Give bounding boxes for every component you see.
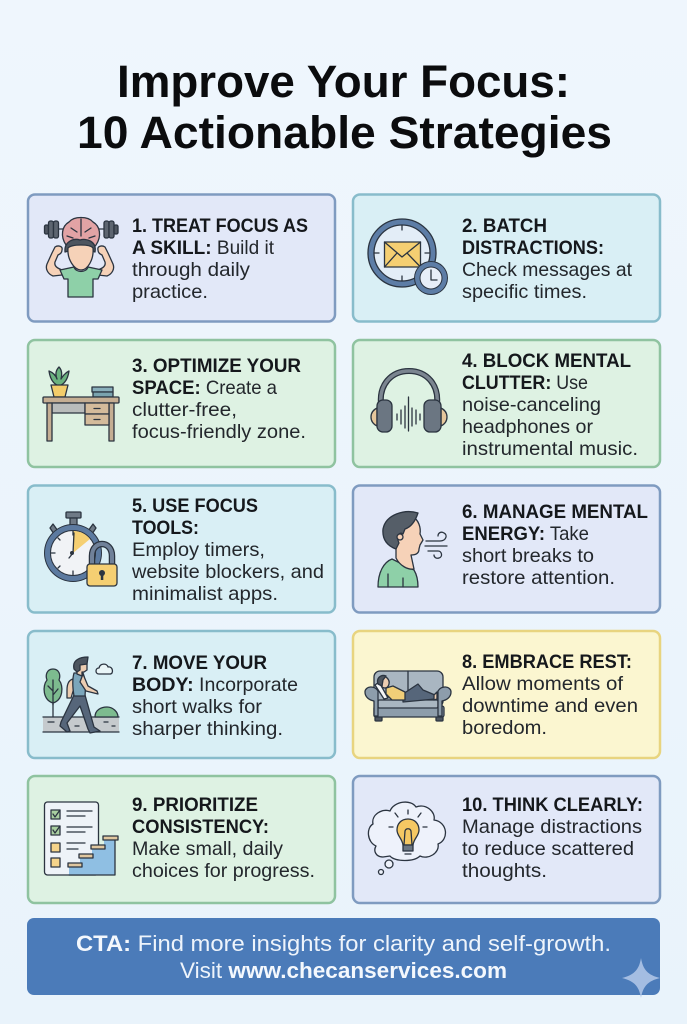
text block: sharper thinking. [132,718,283,740]
panel: 1 treat focus as a skill [28,194,335,322]
text block: headphones or [462,416,593,438]
text block: CLUTTER: Use [462,372,588,394]
text block [131,495,324,605]
icon: desk with plant and books [43,367,119,441]
text block: focus-friendly zone. [132,421,306,443]
title: Improve Your Focus: [117,56,570,107]
panel: 3 optimize your space [28,340,335,467]
title: 10 Actionable Strategies [77,107,612,158]
text block: cta: Visit www.checanservices.com [180,958,507,983]
text block: 4. BLOCK MENTAL [462,350,631,372]
text block: CONSISTENCY: [132,816,269,838]
panel: 6 manage mental energy [353,486,660,612]
text block [462,501,648,589]
text block: clutter-free, [132,399,237,421]
icon: stopwatch and padlock [44,512,117,586]
text block [462,794,643,882]
text block: 5. USE FOCUS [132,495,258,517]
text block: downtime and even [462,695,638,717]
text block: 3. OPTIMIZE YOUR [132,355,301,377]
text block [462,350,638,460]
text block [132,355,306,443]
text block: boredom. [462,717,547,739]
text block [132,652,298,740]
text block: A SKILL: Build it [132,237,275,259]
text block: short breaks to [462,545,594,567]
text block: Employ timers, [132,539,265,561]
text block: 9. PRIORITIZE [132,794,258,816]
text block: 7. MOVE YOUR [132,652,267,674]
icon: brain dumbbell person [44,218,118,297]
text block [462,651,638,739]
text block: choices for progress. [132,860,315,882]
text block: restore attention. [462,567,615,589]
text block: 6. MANAGE MENTAL [462,501,648,523]
text block: 1. TREAT FOCUS AS [132,215,308,237]
panel: 8 embrace rest [353,631,660,758]
panel: call to action [27,918,660,998]
text block: cta: CTA: Find more insights for clarity and self-growth. [76,931,611,956]
text block: instrumental music. [462,438,638,460]
text block: minimalist apps. [132,583,278,605]
panel: 9 prioritize consistency [28,776,335,903]
text block: 10. THINK CLEARLY: [462,794,643,816]
text block: Make small, daily [132,838,283,860]
text block: Allow moments of [462,673,624,695]
panel: 5 use focus tools [28,486,335,612]
text block: specific times. [462,281,587,303]
text block [132,794,315,882]
text block: to reduce scattered [462,838,634,860]
text block: noise-canceling [462,394,601,416]
panel: 4 block mental clutter [353,340,660,467]
text block: 8. EMBRACE REST: [462,651,632,673]
text block: through daily [132,259,250,281]
text block: TOOLS: [132,517,199,539]
icon: person resting on sofa [365,671,451,721]
icon: walking person outdoors [43,657,119,733]
text block: thoughts. [462,860,547,882]
text block: SPACE: Create a [132,377,277,399]
text block [132,215,308,303]
icon: headphones with sound wave [371,371,447,432]
title [77,56,612,158]
text block: cta [76,931,611,983]
text block: practice. [132,281,208,303]
panel: 2 batch distractions [353,194,660,322]
text block: BODY: Incorporate [132,674,298,696]
text block: 2. BATCH [462,215,547,237]
text block: DISTRACTIONS: [462,237,604,259]
icon: sparkle [622,958,660,998]
text block: ENERGY: Take [462,523,589,545]
icon: clock with envelope [368,219,448,295]
icon: thought cloud with light bulb [368,802,445,874]
text block: short walks for [132,696,263,718]
text block: Check messages at [462,259,633,281]
icon: checklist and stairs [44,802,118,875]
icon: person breathing out [378,512,447,587]
text block: website blockers, and [131,561,324,583]
text block: Manage distractions [462,816,642,838]
panel: 7 move your body [28,631,335,758]
text block [462,215,633,303]
panel: 10 think clearly [353,776,660,903]
